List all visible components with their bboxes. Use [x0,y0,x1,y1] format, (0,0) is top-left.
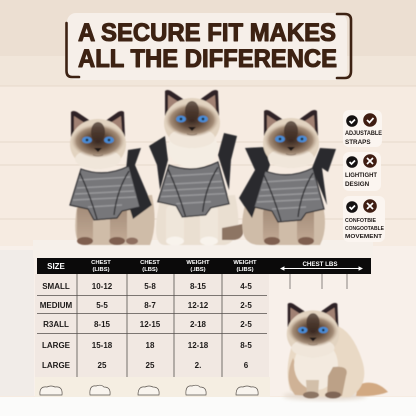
table header labels: WEIGHT [186,260,210,266]
table rows: 2-5 [240,301,252,310]
table rows: 10-12 [92,282,113,291]
title text: A SECURE FIT MAKES [78,19,336,47]
table rows: MEDIUM [40,301,73,310]
table header labels: CHEST [140,260,160,266]
table rows: 6 [244,361,249,370]
table header labels: (LIBS) [236,267,254,273]
title text [78,19,337,73]
benefit badges [343,110,385,242]
size chart table [35,258,371,397]
badge: adjustable straps: STRAPS [345,139,371,146]
cat left in shirt [70,111,155,245]
badge: lightweight design [343,152,381,191]
table header labels: (LBS) [142,267,158,273]
title panel [66,13,347,80]
badge: comfortable movement [343,196,385,242]
title bracket right [337,14,351,78]
chest tick marks [290,274,347,289]
table header labels: SIZE [47,262,66,271]
table header labels: CHEST [91,260,111,266]
table rows: LARGE [42,341,71,350]
table rows: 12-15 [140,320,161,329]
table header labels: (.IBS) [190,267,206,273]
title bracket left [66,23,79,77]
badge: comfortable movement: MOVEMENT [345,234,382,240]
cat right in shirt [239,110,336,245]
badge: adjustable straps: ADJUSTABLE [345,130,382,137]
table rows: 8-15 [94,320,111,329]
table rows: 5-8 [144,282,156,291]
table rows: 2. [195,361,201,370]
paw outlines [40,385,258,395]
table header bar [37,258,371,274]
badge: comfortable movement: CONFOTBIE [345,218,376,224]
table rows: 2-18 [190,320,207,329]
table rows: 2-5 [240,320,252,329]
table rows: 5-5 [96,301,108,310]
title text: ALL THE DIFFERENCE [78,45,337,73]
table rows: 25 [146,361,155,370]
table header labels: WEIGHT [233,260,257,266]
table grid lines [77,274,222,377]
table header labels [47,260,338,273]
table rows: 8-15 [190,282,207,291]
table rows: 25 [98,361,107,370]
table rows: 15-18 [92,341,113,350]
table rows: 12-18 [188,341,209,350]
table rows [40,282,252,370]
badge: adjustable straps [343,110,382,147]
table rows: 18 [146,341,155,350]
table header labels: CHEST LBS [302,261,338,268]
table rows: 12-12 [188,301,209,310]
table rows: 8-7 [144,301,156,310]
cat middle in shirt [149,90,244,246]
badge: lightweight design: DESIGN [345,181,370,188]
table rows: SMALL [42,282,70,291]
badge: comfortable movement: CONGOOTABLE [345,226,384,232]
table header labels: (LIBS) [92,267,110,273]
sitting cat without shirt [283,303,388,400]
chest arrow [281,267,362,270]
table rows: R3ALL [43,320,69,329]
table rows: LARGE [42,361,71,370]
badge: lightweight design: LIGHTIGHT [345,172,377,179]
table rows: 8-5 [240,341,252,350]
table rows: 4-5 [240,282,252,291]
